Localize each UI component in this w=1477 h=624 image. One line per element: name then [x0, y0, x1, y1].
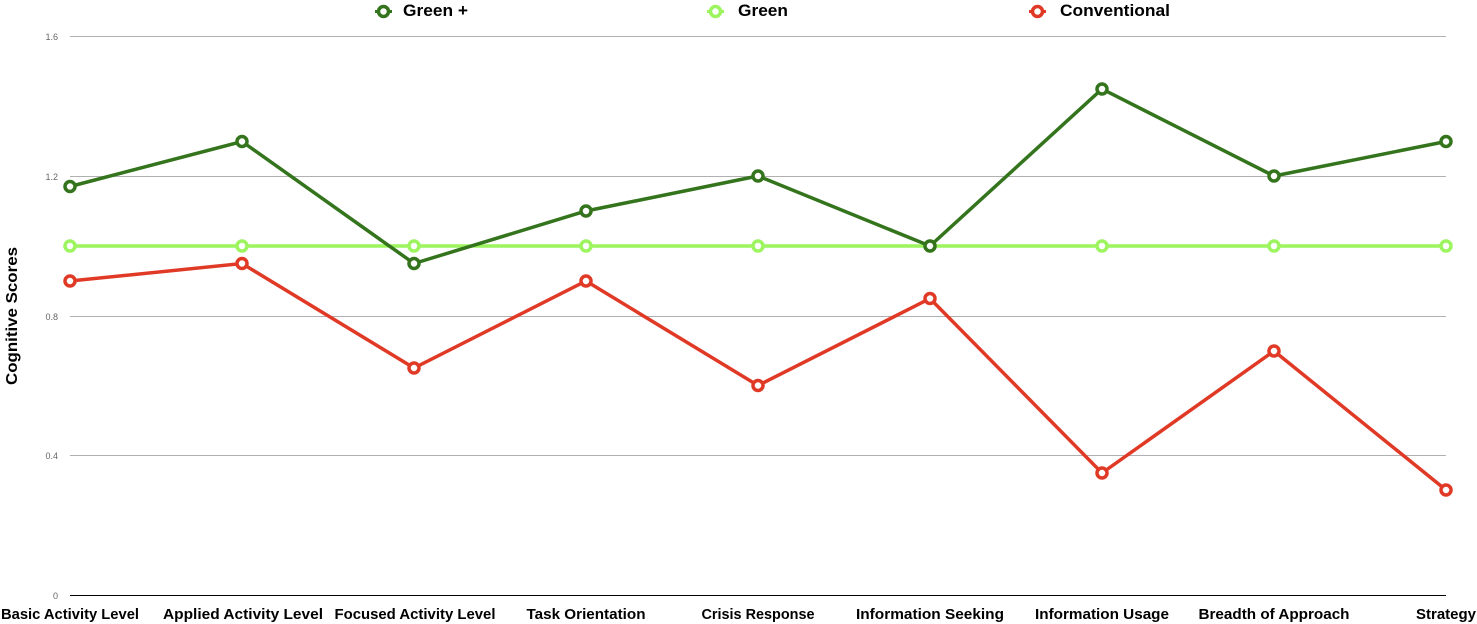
x axis category labels: Task Orientation: [526, 607, 646, 623]
x axis category labels: Information Seeking: [856, 607, 1004, 623]
series: Conventional (red line): [65, 258, 1451, 495]
legend: Conventional: Conventional: [1060, 2, 1170, 20]
y axis tick labels: [45, 32, 58, 601]
x axis category labels: Crisis Response: [702, 607, 814, 623]
legend: Green: [707, 2, 788, 20]
x axis category labels: [1, 607, 1476, 623]
legend: Green: Green: [738, 2, 788, 20]
y axis tick labels: 0.4: [45, 451, 58, 461]
series: Green (light green line): [65, 241, 1451, 251]
x axis category labels: Information Usage: [1035, 607, 1169, 623]
x axis category labels: Strategy: [1416, 607, 1476, 623]
x axis category labels: Applied Activity Level: [163, 607, 323, 623]
y axis tick labels: 1.2: [45, 172, 58, 182]
series: Green + (dark green line): [65, 84, 1451, 268]
x axis category labels: Breadth of Approach: [1198, 607, 1350, 623]
x axis category labels: Focused Activity Level: [334, 607, 496, 623]
x axis category labels: Basic Activity Level: [1, 607, 139, 623]
y axis tick labels: 1.6: [45, 32, 58, 42]
y axis tick labels: 0.8: [45, 312, 58, 322]
y axis tick labels: 0: [53, 591, 58, 601]
x axis line: [70, 594, 1446, 596]
legend: Green +: Green +: [403, 2, 468, 20]
legend: Green +: [375, 2, 468, 20]
y axis title: Cognitive Scores: [4, 247, 21, 385]
